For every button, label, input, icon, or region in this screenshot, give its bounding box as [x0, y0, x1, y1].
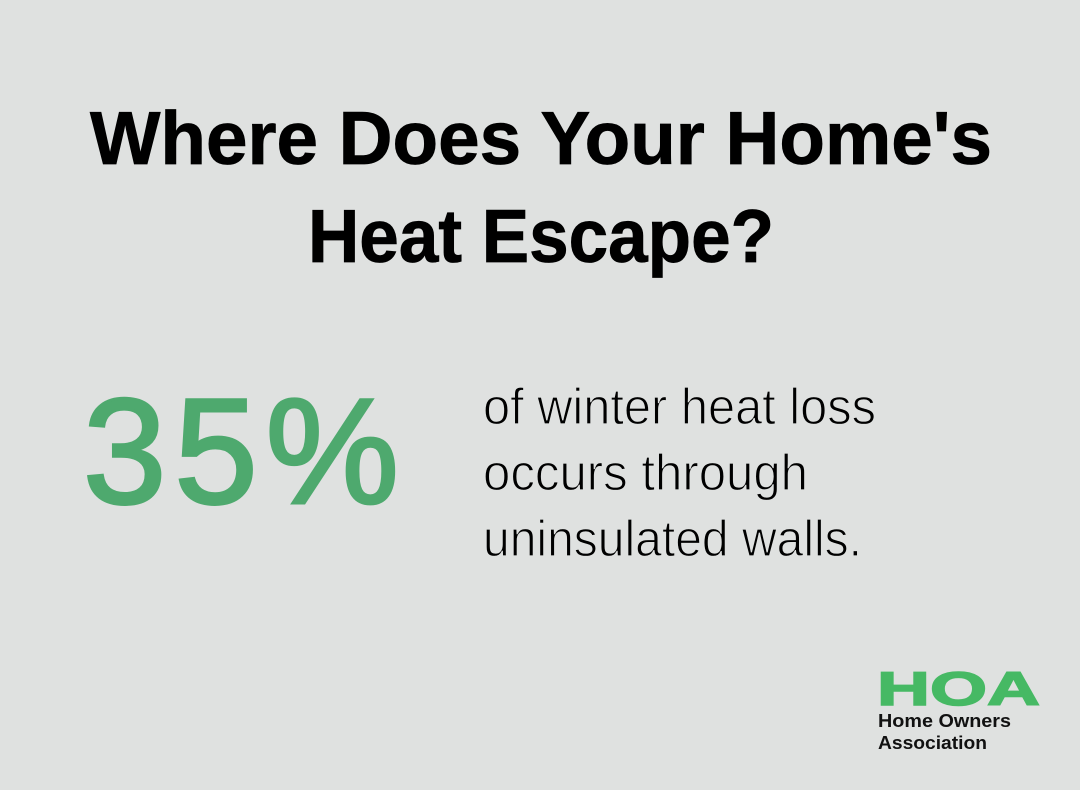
statistic description: occurs through: [483, 444, 808, 501]
title: [90, 96, 992, 278]
title: Where Does Your Home's: [90, 96, 992, 180]
logo: HOA Home Owners Association: [877, 662, 1040, 753]
big statistic: 35%: 35%: [83, 367, 399, 535]
logo: HOA Home Owners Association: Association: [878, 733, 987, 753]
statistic description: uninsulated walls.: [483, 510, 862, 567]
title: Heat Escape?: [308, 194, 774, 278]
logo: HOA Home Owners Association: HOA: [877, 662, 1040, 715]
statistic description: of winter heat loss: [483, 378, 876, 435]
statistic description: [483, 378, 876, 567]
logo: HOA Home Owners Association: Home Owners: [878, 711, 1011, 731]
